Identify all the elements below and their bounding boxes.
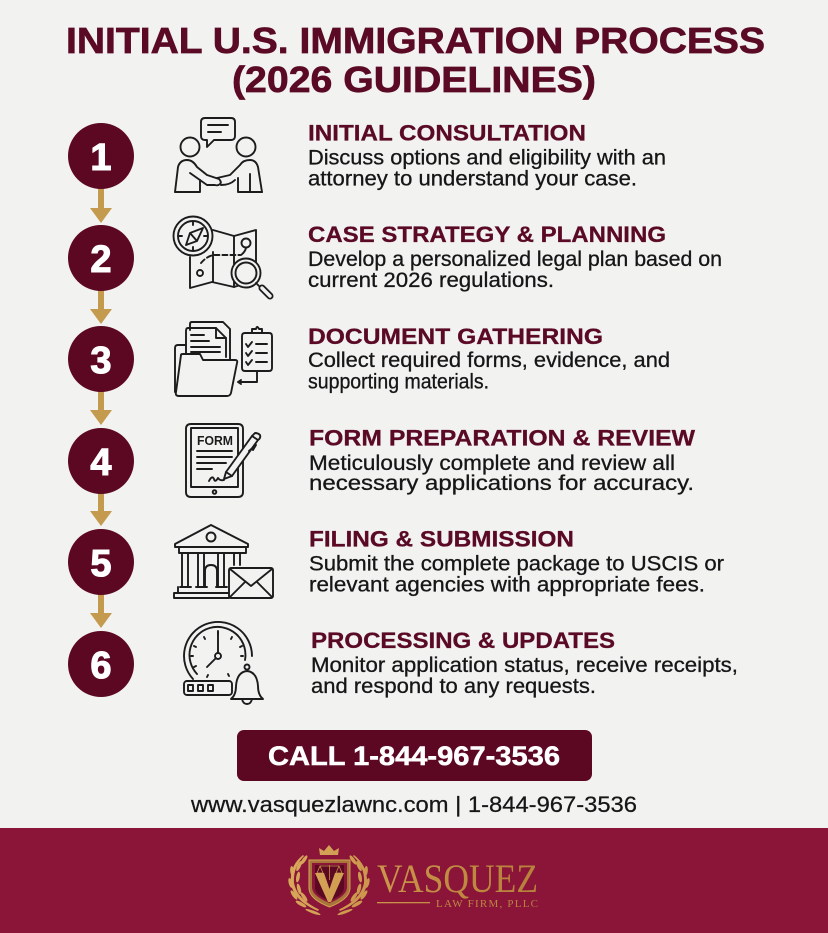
step 4 text: FORM PREPARATION & REVIEW	[309, 426, 696, 450]
step 4 number	[68, 428, 134, 494]
step 5 text: FILING & SUBMISSION	[309, 526, 574, 552]
arrow: step 3 to 4	[90, 391, 112, 425]
logo rule	[377, 902, 430, 903]
step 1 text: INITIAL CONSULTATION	[308, 120, 586, 146]
logo: Vasquez Law Firm	[287, 845, 538, 916]
step 2 text	[308, 222, 722, 292]
logo wordmark: VASQUEZ	[377, 856, 538, 901]
step 3 number: 3	[90, 340, 112, 382]
icon: tablet with form and pen	[186, 424, 260, 497]
call to action button: CALL 1-844-967-3536	[268, 741, 560, 771]
step 6 number	[68, 631, 134, 697]
icon: clock with status bar and bell	[184, 622, 263, 704]
title: INITIAL U.S. IMMIGRATION PROCESS	[66, 20, 765, 61]
logo right wreath	[337, 854, 371, 916]
step 3 text: supporting materials.	[308, 370, 489, 394]
step 6 text	[311, 628, 738, 698]
step 6 text: Monitor application status, receive receipts,	[311, 654, 738, 677]
step 4 number: 4	[90, 442, 112, 484]
step 3 text	[308, 324, 670, 394]
call to action button	[237, 730, 592, 781]
step 4 text	[309, 426, 696, 495]
step 5 text	[309, 526, 724, 596]
step 3 number	[68, 326, 134, 392]
step 1 text: Discuss options and eligibility with an	[308, 146, 666, 170]
icon: folder with documents and checklist	[175, 322, 272, 396]
icon: tablet with form and pen: FORM	[197, 433, 233, 448]
logo shield	[309, 860, 350, 907]
step 2 text: CASE STRATEGY & PLANNING	[308, 222, 666, 247]
arrow: step 5 to 6	[90, 594, 112, 628]
step 1 number: 1	[90, 137, 112, 179]
website and phone line: www.vasquezlawnc.com | 1-844-967-3536	[190, 792, 637, 817]
step 1 text	[308, 120, 666, 190]
step 1 number	[68, 123, 134, 189]
title: (2026 GUIDELINES)	[232, 59, 596, 100]
step 6 text: and respond to any requests.	[311, 675, 596, 698]
step 5 number: 5	[90, 543, 112, 585]
footer band	[0, 828, 828, 933]
logo crown	[319, 845, 339, 855]
step 5 number	[68, 529, 134, 595]
step 1 text: attorney to understand your case.	[308, 168, 637, 190]
step 3 text: DOCUMENT GATHERING	[308, 324, 603, 349]
icon: consultation handshake	[175, 118, 262, 192]
arrow: step 2 to 3	[90, 290, 112, 324]
step 2 number	[68, 225, 134, 291]
step 6 number: 6	[90, 645, 112, 687]
arrow: step 1 to 2	[90, 188, 112, 223]
step 3 text: Collect required forms, evidence, and	[308, 349, 670, 372]
arrow: step 4 to 5	[90, 493, 112, 526]
icon: map with compass and magnifier	[174, 216, 270, 296]
logo subtitle: LAW FIRM, PLLC	[436, 898, 538, 910]
title	[66, 20, 765, 100]
logo left wreath	[287, 854, 321, 916]
step 2 text: Develop a personalized legal plan based on	[308, 248, 722, 271]
step 4 text: Meticulously complete and review all	[309, 452, 675, 475]
icon: courthouse and envelope	[174, 525, 273, 598]
step 5 text: relevant agencies with appropriate fees.	[309, 574, 705, 596]
step 2 text: current 2026 regulations.	[308, 269, 554, 292]
step 5 text: Submit the complete package to USCIS or	[309, 552, 724, 576]
step 6 text: PROCESSING & UPDATES	[311, 628, 615, 653]
step 4 text: necessary applications for accuracy.	[309, 472, 694, 495]
step 2 number: 2	[90, 239, 112, 281]
